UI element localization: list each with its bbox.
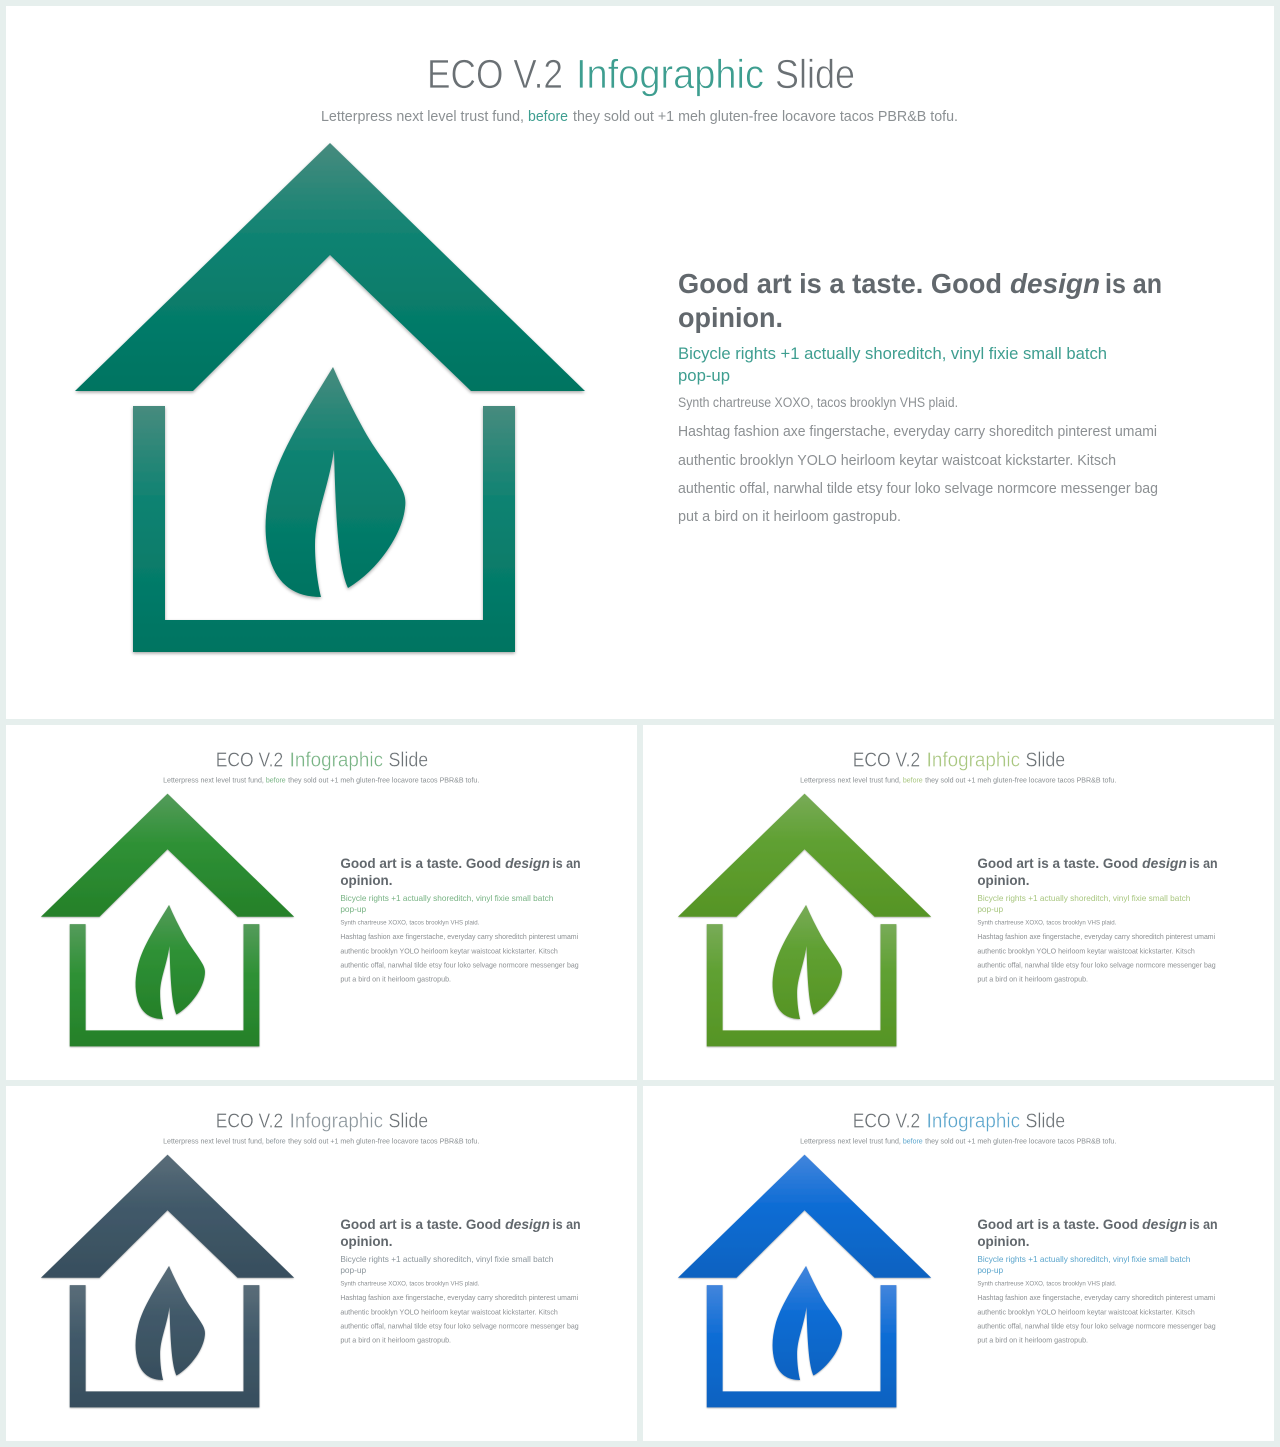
title: Slide	[775, 51, 855, 97]
heading: is an	[552, 855, 581, 871]
icon: eco house with leaf	[678, 1155, 931, 1407]
heading: Good art is a taste. Good	[340, 1216, 501, 1232]
subtitle: they sold out +1 meh gluten-free locavore tacos PBR&B tofu.	[288, 1137, 479, 1146]
slide content: blue	[678, 1110, 1218, 1407]
body text: put a bird on it heirloom gastropub.	[977, 1335, 1088, 1344]
panel: main teal slide	[6, 6, 1274, 719]
subtitle	[800, 1137, 1116, 1146]
title: ECO V.2	[853, 1110, 920, 1132]
subtitle: Letterpress next level trust fund,	[800, 776, 901, 785]
heading: Good art is a taste. Good	[340, 855, 501, 871]
body text: Hashtag fashion axe fingerstache, everyday carry shoreditch pinterest umami	[977, 1293, 1216, 1302]
subtitle: Letterpress next level trust fund,	[163, 776, 264, 785]
body text: Synth chartreuse XOXO, tacos brooklyn VHS plaid.	[678, 395, 958, 410]
body text: authentic brooklyn YOLO heirloom keytar waistcoat kickstarter. Kitsch	[340, 1307, 558, 1316]
title: Infographic	[290, 1110, 383, 1132]
body text: Hashtag fashion axe fingerstache, everyday carry shoreditch pinterest umami	[340, 932, 579, 941]
subtitle: before	[528, 109, 568, 125]
title: Slide	[388, 1110, 428, 1132]
panel: blue slide	[643, 1086, 1274, 1441]
heading: design	[505, 1216, 550, 1232]
subheading: pop-up	[340, 904, 366, 914]
subtitle: before	[266, 776, 286, 785]
heading	[977, 1216, 1218, 1249]
title: Slide	[388, 749, 428, 771]
subtitle	[163, 1137, 479, 1146]
body text: authentic offal, narwhal tilde etsy four loko selvage normcore messenger bag	[977, 1321, 1216, 1330]
subtitle: Letterpress next level trust fund,	[800, 1137, 901, 1146]
heading	[340, 855, 581, 888]
title: ECO V.2	[853, 749, 920, 771]
heading	[678, 268, 1162, 333]
subtitle: before	[266, 1137, 286, 1146]
heading: is an	[1189, 855, 1218, 871]
title: ECO V.2	[216, 749, 283, 771]
subheading: Bicycle rights +1 actually shoreditch, vinyl fixie small batch	[678, 344, 1107, 363]
icon: eco house with leaf	[678, 794, 931, 1046]
heading	[977, 855, 1218, 888]
body text: put a bird on it heirloom gastropub.	[977, 974, 1088, 983]
title: ECO V.2	[427, 51, 563, 97]
body text	[977, 920, 1216, 983]
body text: authentic offal, narwhal tilde etsy four loko selvage normcore messenger bag	[340, 960, 579, 969]
panel: slate slide	[6, 1086, 637, 1441]
body text: Synth chartreuse XOXO, tacos brooklyn VHS plaid.	[340, 920, 479, 927]
subheading	[977, 1254, 1191, 1275]
body text: Synth chartreuse XOXO, tacos brooklyn VHS plaid.	[340, 1281, 479, 1288]
title	[853, 1110, 1065, 1132]
subheading: pop-up	[678, 366, 730, 385]
subheading: Bicycle rights +1 actually shoreditch, vinyl fixie small batch	[977, 1254, 1191, 1264]
body text: put a bird on it heirloom gastropub.	[678, 509, 901, 525]
heading: design	[1142, 855, 1187, 871]
title	[216, 749, 428, 771]
subtitle	[163, 776, 479, 785]
heading: opinion.	[977, 1233, 1029, 1249]
title: Infographic	[576, 51, 764, 97]
subtitle: they sold out +1 meh gluten-free locavore tacos PBR&B tofu.	[573, 109, 958, 125]
slide content: olive	[678, 749, 1218, 1046]
title: Infographic	[927, 1110, 1020, 1132]
title	[216, 1110, 428, 1132]
body text: Hashtag fashion axe fingerstache, everyday carry shoreditch pinterest umami	[678, 424, 1157, 440]
body text: put a bird on it heirloom gastropub.	[340, 974, 451, 983]
subtitle: before	[903, 1137, 923, 1146]
body text: Hashtag fashion axe fingerstache, everyday carry shoreditch pinterest umami	[977, 932, 1216, 941]
heading: is an	[1105, 268, 1162, 299]
heading: design	[505, 855, 550, 871]
title: Slide	[1025, 749, 1065, 771]
subheading: pop-up	[977, 904, 1003, 914]
subtitle	[321, 109, 958, 125]
body text: Synth chartreuse XOXO, tacos brooklyn VHS plaid.	[977, 1281, 1116, 1288]
heading: is an	[552, 1216, 581, 1232]
subtitle: they sold out +1 meh gluten-free locavore tacos PBR&B tofu.	[925, 1137, 1116, 1146]
slide content: green	[41, 749, 581, 1046]
slide content: slate	[41, 1110, 581, 1407]
title: Slide	[1025, 1110, 1065, 1132]
heading: opinion.	[340, 872, 392, 888]
subtitle: before	[903, 776, 923, 785]
body text	[340, 920, 579, 983]
subheading: Bicycle rights +1 actually shoreditch, vinyl fixie small batch	[340, 893, 554, 903]
body text: authentic brooklyn YOLO heirloom keytar waistcoat kickstarter. Kitsch	[340, 946, 558, 955]
body text	[340, 1281, 579, 1344]
heading: design	[1142, 1216, 1187, 1232]
heading: is an	[1189, 1216, 1218, 1232]
subtitle: they sold out +1 meh gluten-free locavore tacos PBR&B tofu.	[288, 776, 479, 785]
body text: authentic brooklyn YOLO heirloom keytar waistcoat kickstarter. Kitsch	[977, 1307, 1195, 1316]
body text	[977, 1281, 1216, 1344]
subtitle: they sold out +1 meh gluten-free locavore tacos PBR&B tofu.	[925, 776, 1116, 785]
panel: olive slide	[643, 725, 1274, 1080]
subheading	[340, 1254, 554, 1275]
title: Infographic	[290, 749, 383, 771]
heading: opinion.	[340, 1233, 392, 1249]
subheading	[977, 893, 1191, 914]
subheading	[340, 893, 554, 914]
title	[853, 749, 1065, 771]
subtitle	[800, 776, 1116, 785]
heading: design	[1010, 268, 1100, 299]
heading: Good art is a taste. Good	[977, 1216, 1138, 1232]
heading: Good art is a taste. Good	[678, 268, 1002, 299]
body text: authentic brooklyn YOLO heirloom keytar waistcoat kickstarter. Kitsch	[977, 946, 1195, 955]
heading: Good art is a taste. Good	[977, 855, 1138, 871]
icon: eco house with leaf	[41, 794, 294, 1046]
panel: green slide	[6, 725, 637, 1080]
subheading: pop-up	[977, 1265, 1003, 1275]
subheading: Bicycle rights +1 actually shoreditch, vinyl fixie small batch	[977, 893, 1191, 903]
subtitle: Letterpress next level trust fund,	[163, 1137, 264, 1146]
body text: authentic offal, narwhal tilde etsy four loko selvage normcore messenger bag	[678, 481, 1158, 497]
subheading: Bicycle rights +1 actually shoreditch, vinyl fixie small batch	[340, 1254, 554, 1264]
title: Infographic	[927, 749, 1020, 771]
heading	[340, 1216, 581, 1249]
body text: authentic offal, narwhal tilde etsy four loko selvage normcore messenger bag	[340, 1321, 579, 1330]
body text: authentic offal, narwhal tilde etsy four loko selvage normcore messenger bag	[977, 960, 1216, 969]
heading: opinion.	[678, 302, 783, 333]
subheading	[678, 344, 1107, 385]
body text: Hashtag fashion axe fingerstache, everyday carry shoreditch pinterest umami	[340, 1293, 579, 1302]
title: ECO V.2	[216, 1110, 283, 1132]
body text	[678, 395, 1158, 525]
icon: eco house with leaf	[75, 143, 585, 652]
body text: authentic brooklyn YOLO heirloom keytar waistcoat kickstarter. Kitsch	[678, 453, 1116, 469]
heading: opinion.	[977, 872, 1029, 888]
icon: eco house with leaf	[41, 1155, 294, 1407]
title	[427, 51, 855, 97]
body text: put a bird on it heirloom gastropub.	[340, 1335, 451, 1344]
body text: Synth chartreuse XOXO, tacos brooklyn VHS plaid.	[977, 920, 1116, 927]
subheading: pop-up	[340, 1265, 366, 1275]
subtitle: Letterpress next level trust fund,	[321, 109, 524, 125]
